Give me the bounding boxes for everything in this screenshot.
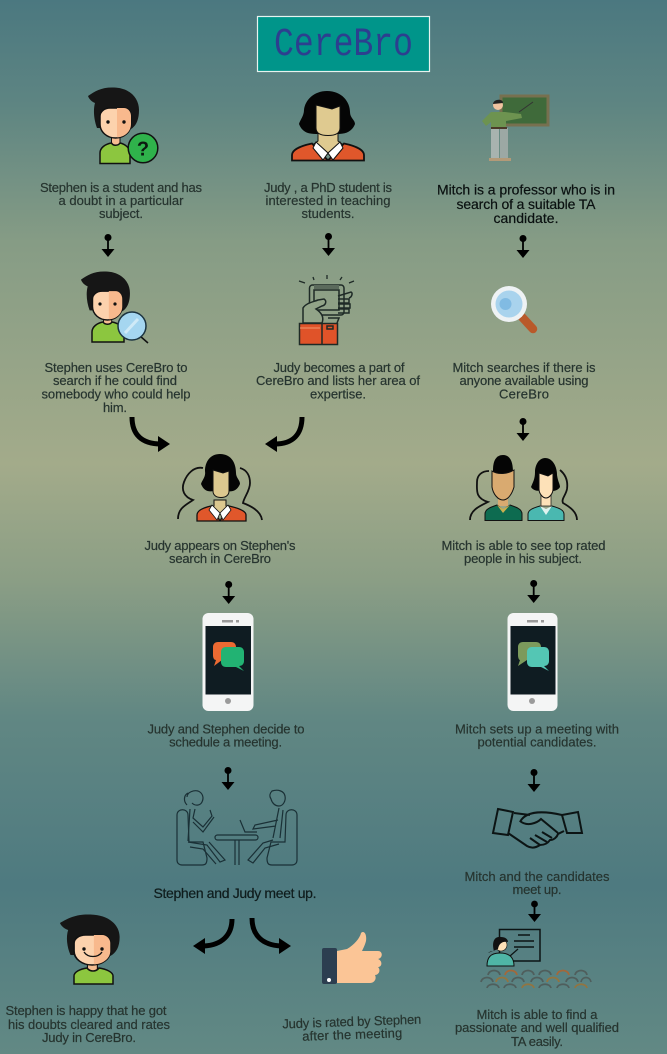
text: Mitch sets meeting: [455, 722, 619, 750]
text: Stephen intro: Stephen is a student and has: [40, 180, 202, 195]
arrow: Mitch rated to phone: [527, 580, 540, 603]
text: Mitch top rated: [442, 538, 606, 566]
text: Stephen intro: a doubt in a particular: [58, 193, 184, 208]
icon: teacher with audience: [481, 930, 591, 988]
icon: handshake: [493, 809, 582, 848]
title: CereBro: [274, 23, 413, 68]
text: Mitch top rated: people in his subject.: [464, 551, 582, 566]
arrow: Mitch step 1: [516, 235, 530, 258]
text: Judy rated: Judy is rated by Stephen: [282, 1012, 421, 1031]
text: Mitch intro: Mitch is a professor who is in: [437, 182, 615, 198]
icon: thumbs up: [322, 932, 382, 984]
text: Judy intro: students.: [302, 206, 354, 221]
text: Mitch and candidates: meet up.: [512, 882, 562, 897]
text: Stephen searches: somebody who could help: [42, 386, 190, 402]
text: Judy joins: CereBro and lists her area of: [256, 373, 420, 388]
text: Judy joins: [256, 360, 420, 402]
text: Mitch sets meeting: Mitch sets up a meeting with: [455, 722, 619, 736]
text: Judy rated: [282, 1012, 422, 1044]
text: Mitch intro: [437, 182, 615, 226]
text: Stephen searches: [42, 360, 190, 415]
icon: Stephen with question mark: ?: [137, 138, 149, 160]
text: Mitch top rated: Mitch is able to see top rated: [442, 538, 606, 553]
text: Mitch and candidates: [464, 869, 610, 897]
text: Stephen searches: him.: [103, 400, 127, 415]
icon: phone with chat bubbles right: [508, 613, 558, 711]
icon: phone with chat bubbles left: [202, 613, 254, 711]
arrow: curved to thumbs up: [252, 918, 291, 954]
text: Mitch finds TA: passionate and well qualified: [455, 1020, 619, 1035]
arrow: to meet up: [222, 767, 234, 790]
text: Stephen intro: [40, 180, 202, 221]
text: Mitch searches: Mitch searches if there is: [452, 360, 596, 375]
text: Mitch intro: search of a suitable TA: [456, 196, 596, 212]
text: Judy and Stephen decide: Judy and Stephen decide to: [148, 722, 304, 736]
icon: Judy highlighted in crowd: [178, 454, 262, 521]
text: Judy appears: search in CereBro: [169, 551, 271, 566]
arrow: curved left to Judy match: [265, 417, 302, 452]
arrow: Judy step 1: [322, 233, 335, 256]
icon: happy Stephen: [60, 914, 120, 984]
icon: two people meeting at table: [177, 790, 297, 865]
text: Stephen happy: Judy in CereBro.: [42, 1030, 136, 1045]
arrow: curved right to Judy match: [132, 417, 170, 452]
icon: magnifying glass: [491, 286, 533, 329]
text: Mitch searches: [452, 360, 596, 402]
text: Stephen intro: subject.: [99, 206, 143, 221]
text: Mitch searches: CereBro: [499, 386, 549, 402]
text: Mitch finds TA: TA easily.: [511, 1034, 563, 1049]
arrow: to handshake: [528, 769, 540, 792]
text: Judy intro: [264, 180, 392, 221]
title: [258, 16, 430, 72]
text: Mitch finds TA: [455, 1007, 619, 1049]
arrow: to TA found: [528, 901, 541, 922]
text: Stephen happy: [6, 1003, 170, 1045]
icon: hand holding phone: [299, 275, 354, 344]
text: Judy appears: Judy appears on Stephen's: [144, 538, 296, 553]
text: Stephen happy: his doubts cleared and rates: [8, 1017, 170, 1032]
arrow: Mitch step 2: [516, 418, 530, 441]
text: Mitch intro: candidate.: [494, 210, 558, 226]
text: Stephen happy: Stephen is happy that he got: [6, 1003, 167, 1018]
text: Mitch and candidates: Mitch and the candidates: [464, 869, 610, 884]
text: Judy and Stephen decide: schedule a meeting.: [169, 734, 282, 750]
text: Judy rated: after the meeting: [302, 1025, 402, 1044]
arrow: Stephen step 1: [102, 234, 114, 257]
text: Mitch searches: anyone available using: [460, 373, 588, 388]
icon: Mitch teaching at blackboard: [482, 96, 548, 161]
icon: Stephen searching: [81, 271, 148, 343]
text: Judy intro: interested in teaching: [266, 193, 390, 208]
text: Stephen searches: Stephen uses CereBro to: [44, 360, 188, 375]
text: Judy and Stephen decide: [148, 722, 304, 750]
icon: Judy: [292, 91, 364, 160]
text: Stephen searches: search if he could find: [53, 373, 177, 388]
icon: two top rated people: [470, 455, 577, 520]
text: Judy appears: [144, 538, 296, 566]
text: Judy joins: expertise.: [310, 386, 366, 402]
icon: Stephen with question mark: [88, 87, 158, 164]
text: Stephen and Judy meet: Stephen and Judy meet up.: [154, 885, 316, 901]
text: Mitch sets meeting: potential candidates.: [478, 734, 596, 750]
text: Judy intro: Judy , a PhD student is: [264, 180, 392, 195]
text: Judy joins: Judy becomes a part of: [274, 360, 405, 375]
arrow: Judy appears to phone: [222, 581, 235, 604]
arrow: curved to happy Stephen: [193, 919, 232, 954]
text: Mitch finds TA: Mitch is able to find a: [476, 1007, 598, 1022]
